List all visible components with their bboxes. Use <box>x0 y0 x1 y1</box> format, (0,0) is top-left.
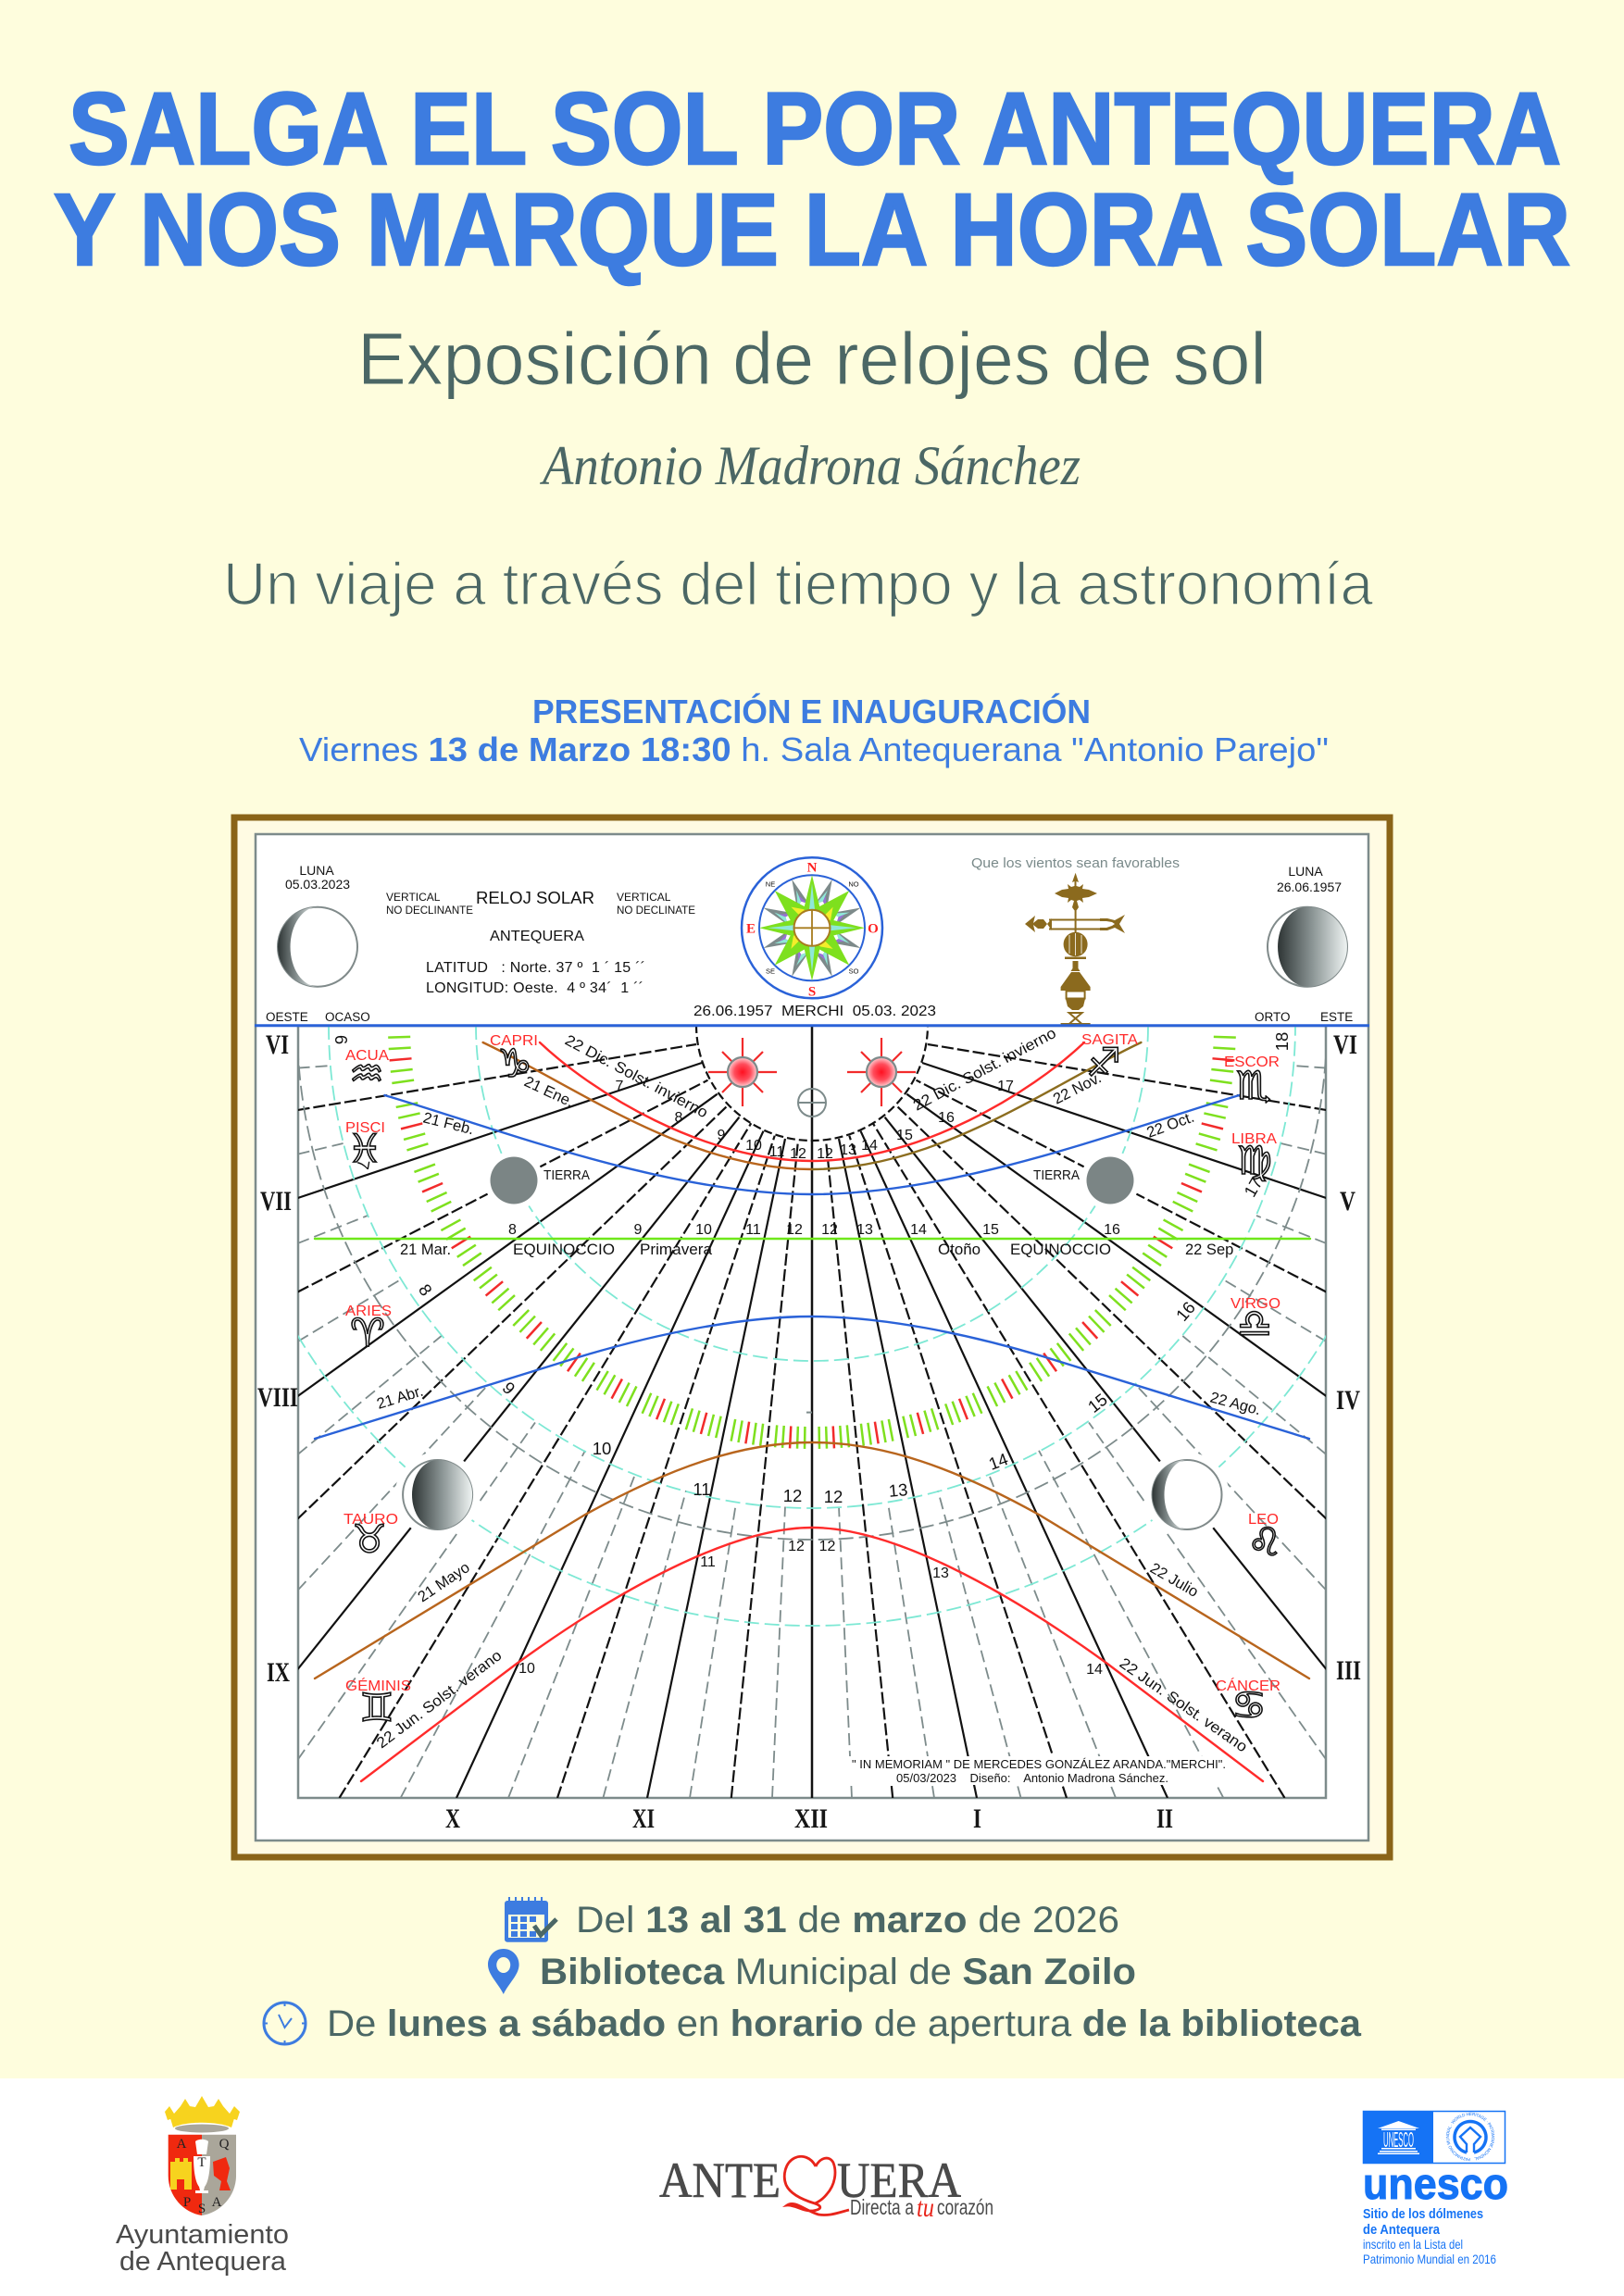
solar hour numbers: 14 <box>910 1222 927 1238</box>
solar hour numbers: 9 <box>634 1222 643 1238</box>
author signature: Antonio Madrona Sánchez <box>539 435 1081 496</box>
icon: crescent moon 05.03.2023 <box>278 907 357 987</box>
date labels: EQUINOCCIO <box>513 1242 615 1258</box>
roman hour numerals: X <box>445 1803 460 1834</box>
icon: compass rose: SE <box>766 967 775 975</box>
memorial dedication: " IN MEMORIAM " DE MERCEDES GONZÁLEZ ARANDA."MERCHI". <box>852 1757 1226 1771</box>
icon: calendar <box>505 1897 556 1942</box>
zodiac symbols: ♊︎ <box>359 1685 394 1730</box>
zodiac names: LEO <box>1248 1512 1279 1528</box>
sundial header texts <box>266 855 1353 1024</box>
panel: framed sundial <box>211 817 1413 1857</box>
solar hour numbers: 12 <box>817 1146 833 1162</box>
solar hour numbers: 14 <box>861 1138 878 1154</box>
zodiac symbols: ♉︎ <box>352 1516 387 1562</box>
hour lines and arcs <box>298 1027 1326 1798</box>
solar hour numbers <box>331 1032 1292 1678</box>
zodiac symbols: ♑︎ <box>497 1041 532 1086</box>
roman hour numerals: VIII <box>257 1382 298 1413</box>
date labels: Otoño <box>938 1242 981 1258</box>
logo: UNESCO: unesco <box>1363 2159 1508 2208</box>
solar hour numbers: 12 <box>824 1487 843 1506</box>
date line: Del 13 al 31 de marzo de 2026 <box>576 1900 1119 1940</box>
zodiac names: ACUA <box>345 1048 389 1064</box>
solar hour numbers: 17 <box>1240 1174 1267 1200</box>
zodiac names: GÉMINIS <box>345 1677 411 1694</box>
logo: UNESCO: PATRIMONIO MUNDIAL · WORLD HERITAGE · PATRIMOINE MONDIAL <box>1446 2113 1494 2161</box>
logo: coat of arms: A <box>177 2137 187 2152</box>
solar hour numbers: 10 <box>593 1439 611 1458</box>
logo: UNESCO: Sitio de los dólmenes <box>1363 2206 1483 2222</box>
roman hour numerals: XI <box>632 1803 655 1834</box>
sundial header texts: 26.06.1957 <box>1277 880 1342 894</box>
solar hour numbers: 12 <box>783 1486 802 1505</box>
solar hour numbers: 9 <box>499 1378 519 1398</box>
green and red declination ticks <box>388 1037 1236 1449</box>
sundial header texts: ORTO <box>1255 1010 1291 1024</box>
icon: compass rose: O <box>868 921 879 936</box>
sundial header texts: LUNA <box>1288 864 1323 879</box>
roman hour numerals: VI <box>1333 1029 1357 1060</box>
icon: clock <box>264 2003 306 2044</box>
zodiac names: SAGITA <box>1081 1032 1138 1048</box>
zodiac symbols: ♓︎ <box>347 1126 382 1171</box>
icon: compass rose <box>742 857 882 999</box>
solar hour numbers: 13 <box>840 1142 856 1158</box>
roman hour numerals: VII <box>260 1186 292 1217</box>
solar hour numbers: 13 <box>888 1479 908 1501</box>
icon: gnomon base <box>798 1089 826 1117</box>
date labels: 22 Oct. <box>1144 1109 1196 1142</box>
date labels <box>374 1025 1263 1755</box>
roman hour numerals: III <box>1336 1655 1361 1686</box>
logo: UNESCO: Patrimonio Mundial en 2016 <box>1363 2252 1496 2266</box>
logo: coat of arms: Q <box>219 2137 230 2152</box>
earth labels <box>543 1167 1080 1183</box>
solar hour numbers: 14 <box>1086 1662 1103 1678</box>
solar hour numbers: 6 <box>331 1035 351 1044</box>
dial frame <box>298 1026 1326 1798</box>
solar hour numbers: 12 <box>819 1539 835 1554</box>
icon: compass rose: S <box>808 984 816 999</box>
earth labels: TIERRA <box>543 1167 590 1183</box>
solar hour numbers: 8 <box>675 1110 683 1126</box>
zodiac names <box>344 1032 1280 1694</box>
icon: lower right moon <box>1152 1460 1222 1529</box>
solar hour numbers: 13 <box>932 1566 949 1581</box>
sundial header texts: Que los vientos sean favorables <box>971 855 1180 871</box>
roman hour numerals: IV <box>1336 1385 1360 1416</box>
solar hour numbers: 16 <box>938 1110 955 1126</box>
date labels: 21 Ene. <box>521 1073 576 1111</box>
earth labels: TIERRA <box>1033 1167 1080 1183</box>
solar hour numbers: 10 <box>695 1222 712 1238</box>
roman hour numerals: V <box>1340 1186 1355 1217</box>
solar hour numbers: 11 <box>745 1222 761 1238</box>
presentation block: Viernes 13 de Marzo 18:30 h. Sala Antequerana "Antonio Parejo" <box>299 730 1329 768</box>
zodiac names: TAURO <box>344 1512 398 1528</box>
sundial header texts: LATITUD : Norte. 37 º 1 ´ 15 ´´ <box>426 960 645 976</box>
date labels: 22 Dic. Solst. invierno <box>562 1032 710 1121</box>
icon: compass rose: N <box>807 860 818 875</box>
sundial header texts: ESTE <box>1320 1010 1353 1024</box>
logo: coat of arms: T <box>197 2155 206 2170</box>
sundial header texts: LUNA <box>299 863 334 878</box>
solar hour numbers: 16 <box>1104 1222 1120 1238</box>
icon: location pin <box>488 1949 519 1994</box>
blue horizon line <box>255 1024 1369 1027</box>
solar hour numbers: 16 <box>1172 1298 1199 1325</box>
location line: Biblioteca Municipal de San Zoilo <box>540 1952 1136 1992</box>
title <box>54 72 1570 287</box>
memorial dedication: 05/03/2023 Diseño: Antonio Madrona Sánchez. <box>896 1771 1168 1785</box>
solar hour numbers: 9 <box>718 1128 726 1143</box>
zodiac names: VIRGO <box>1230 1296 1280 1312</box>
tagline: Un viaje a través del tiempo y la astronomía <box>223 550 1374 618</box>
icon: weather vane <box>1025 873 1125 1026</box>
sundial header texts: RELOJ SOLAR <box>476 888 594 907</box>
date labels: 22 Sep <box>1185 1242 1233 1258</box>
zodiac names: CAPRI <box>490 1033 538 1049</box>
icon: compass rose: NE <box>766 880 775 888</box>
sundial header texts: NO DECLINATE <box>617 904 695 917</box>
sundial header texts: OCASO <box>325 1010 370 1024</box>
solar hour numbers: 10 <box>745 1138 762 1154</box>
date labels: 22 Jun. Solst. verano <box>374 1647 505 1752</box>
solar hour numbers: 8 <box>508 1222 517 1238</box>
date labels: 21 Abr. <box>375 1383 425 1413</box>
date labels: 22 Ago. <box>1208 1389 1263 1418</box>
logo: coat of arms: S <box>198 2202 206 2216</box>
sundial header texts: NO DECLINANTE <box>386 904 473 917</box>
logo: coat of arms: A <box>212 2195 222 2210</box>
icon: right sun <box>847 1038 916 1106</box>
panel: footer <box>0 2078 1624 2296</box>
logo: UNESCO: inscrito en la Lista del <box>1363 2237 1463 2252</box>
zodiac symbols <box>347 1040 1282 1730</box>
solar hour numbers: 11 <box>769 1144 784 1160</box>
solar hour numbers: 17 <box>997 1079 1014 1094</box>
sundial header texts: VERTICAL <box>386 891 441 904</box>
roman hour numerals: II <box>1156 1803 1173 1834</box>
solar hour numbers: 14 <box>986 1449 1010 1474</box>
date labels: 21 Mayo <box>415 1559 473 1605</box>
presentation block: PRESENTACIÓN E INAUGURACIÓN <box>532 692 1091 730</box>
date labels: 22 Nov. <box>1051 1069 1104 1108</box>
zodiac names: LIBRA <box>1231 1131 1277 1147</box>
sundial chart <box>255 1024 1369 1828</box>
roman hour numerals <box>257 1029 1361 1834</box>
sundial header texts: LONGITUD: Oeste. 4 º 34´ 1 ´´ <box>426 980 643 996</box>
logo: coat of arms: Ayuntamiento <box>116 2220 289 2250</box>
sundial header texts: 26.06.1957 MERCHI 05.03. 2023 <box>693 1004 936 1019</box>
solar hour numbers: 18 <box>1272 1032 1292 1051</box>
roman hour numerals: XII <box>794 1803 828 1834</box>
logo: Antequera: corazón <box>937 2195 993 2219</box>
sundial header texts: 05.03.2023 <box>285 877 350 892</box>
date labels: 22 Jun. Solst. verano <box>1117 1655 1250 1755</box>
icon: earth right <box>1087 1157 1133 1204</box>
zodiac symbols: ♒︎ <box>349 1051 384 1096</box>
logo: UNESCO <box>1363 2111 1508 2266</box>
icon: left sun <box>708 1038 777 1106</box>
opening hours line: De lunes a sábado en horario de apertura de la biblioteca <box>327 2003 1362 2044</box>
roman hour numerals: VI <box>266 1029 289 1060</box>
logo: coat of arms <box>116 2096 289 2277</box>
memorial dedication <box>848 1756 1228 1785</box>
date labels: 22 Julio <box>1147 1560 1201 1601</box>
icon: compass rose: NO <box>848 880 859 888</box>
zodiac symbols: ♐︎ <box>1086 1040 1121 1085</box>
logo: Antequera: UERA <box>837 2152 961 2208</box>
zodiac names: ESCOR <box>1224 1054 1280 1070</box>
solar hour numbers: 7 <box>353 1158 374 1171</box>
zodiac symbols: ♋︎ <box>1231 1682 1267 1728</box>
zodiac names: PISCI <box>345 1120 385 1136</box>
date labels: EQUINOCCIO <box>1010 1242 1111 1258</box>
zodiac symbols: ♏︎ <box>1236 1063 1271 1108</box>
solar hour numbers: 11 <box>700 1554 716 1570</box>
date labels: 22 Dic. Solst. invierno <box>910 1025 1059 1115</box>
roman hour numerals: I <box>973 1803 981 1834</box>
icon: earth left <box>491 1157 537 1204</box>
solar hour numbers: 15 <box>982 1222 999 1238</box>
zodiac symbols: ♎︎ <box>1237 1301 1272 1346</box>
solar hour numbers: 12 <box>786 1222 803 1238</box>
solar hour numbers: 11 <box>693 1479 711 1499</box>
solar hour numbers: 12 <box>788 1539 805 1554</box>
logo: Antequera: Directa a <box>850 2195 914 2219</box>
zodiac names: ARIES <box>345 1304 392 1319</box>
sundial header texts: VERTICAL <box>617 891 671 904</box>
logo: UNESCO: UNESCO <box>1383 2128 1414 2152</box>
icon: compass rose: SO <box>849 967 859 975</box>
logo: Antequera <box>659 2152 993 2223</box>
solar hour numbers: 12 <box>790 1146 806 1162</box>
logo: Antequera: ANTE <box>659 2152 781 2208</box>
date curves <box>315 1042 1310 1781</box>
date labels: 21 Mar. <box>400 1242 451 1258</box>
solar hour numbers: 8 <box>415 1280 436 1300</box>
logo: Antequera: tu <box>917 2192 934 2223</box>
icon: gibbous moon 26.06.1957 <box>1268 907 1347 987</box>
zodiac names: CÁNCER <box>1216 1677 1280 1694</box>
solar hour numbers: 15 <box>1084 1390 1111 1416</box>
subtitle: exposicion: Exposición de relojes de sol <box>357 318 1267 400</box>
roman hour numerals: IX <box>267 1657 290 1688</box>
icon: compass rose: E <box>746 921 756 936</box>
solar hour numbers: 7 <box>616 1079 624 1094</box>
sundial header texts: OESTE <box>266 1010 308 1024</box>
logo: coat of arms: P <box>183 2195 191 2210</box>
logo: UNESCO: de Antequera <box>1363 2222 1441 2238</box>
zodiac symbols: ♌︎ <box>1247 1519 1282 1565</box>
zodiac symbols: ♍︎ <box>1237 1138 1272 1183</box>
sundial header texts: ANTEQUERA <box>490 929 584 944</box>
logo: coat of arms: de Antequera <box>119 2247 287 2277</box>
solar hour numbers: 12 <box>821 1222 838 1238</box>
solar hour numbers: 13 <box>856 1222 873 1238</box>
icon: lower left moon <box>403 1460 472 1529</box>
solar hour numbers: 15 <box>896 1128 913 1143</box>
date labels: 21 Feb. <box>421 1109 476 1138</box>
solar hour numbers: 10 <box>518 1661 535 1677</box>
zodiac symbols: ♈︎ <box>350 1310 385 1355</box>
presentation block <box>299 692 1329 768</box>
date labels: Primavera <box>640 1242 713 1258</box>
